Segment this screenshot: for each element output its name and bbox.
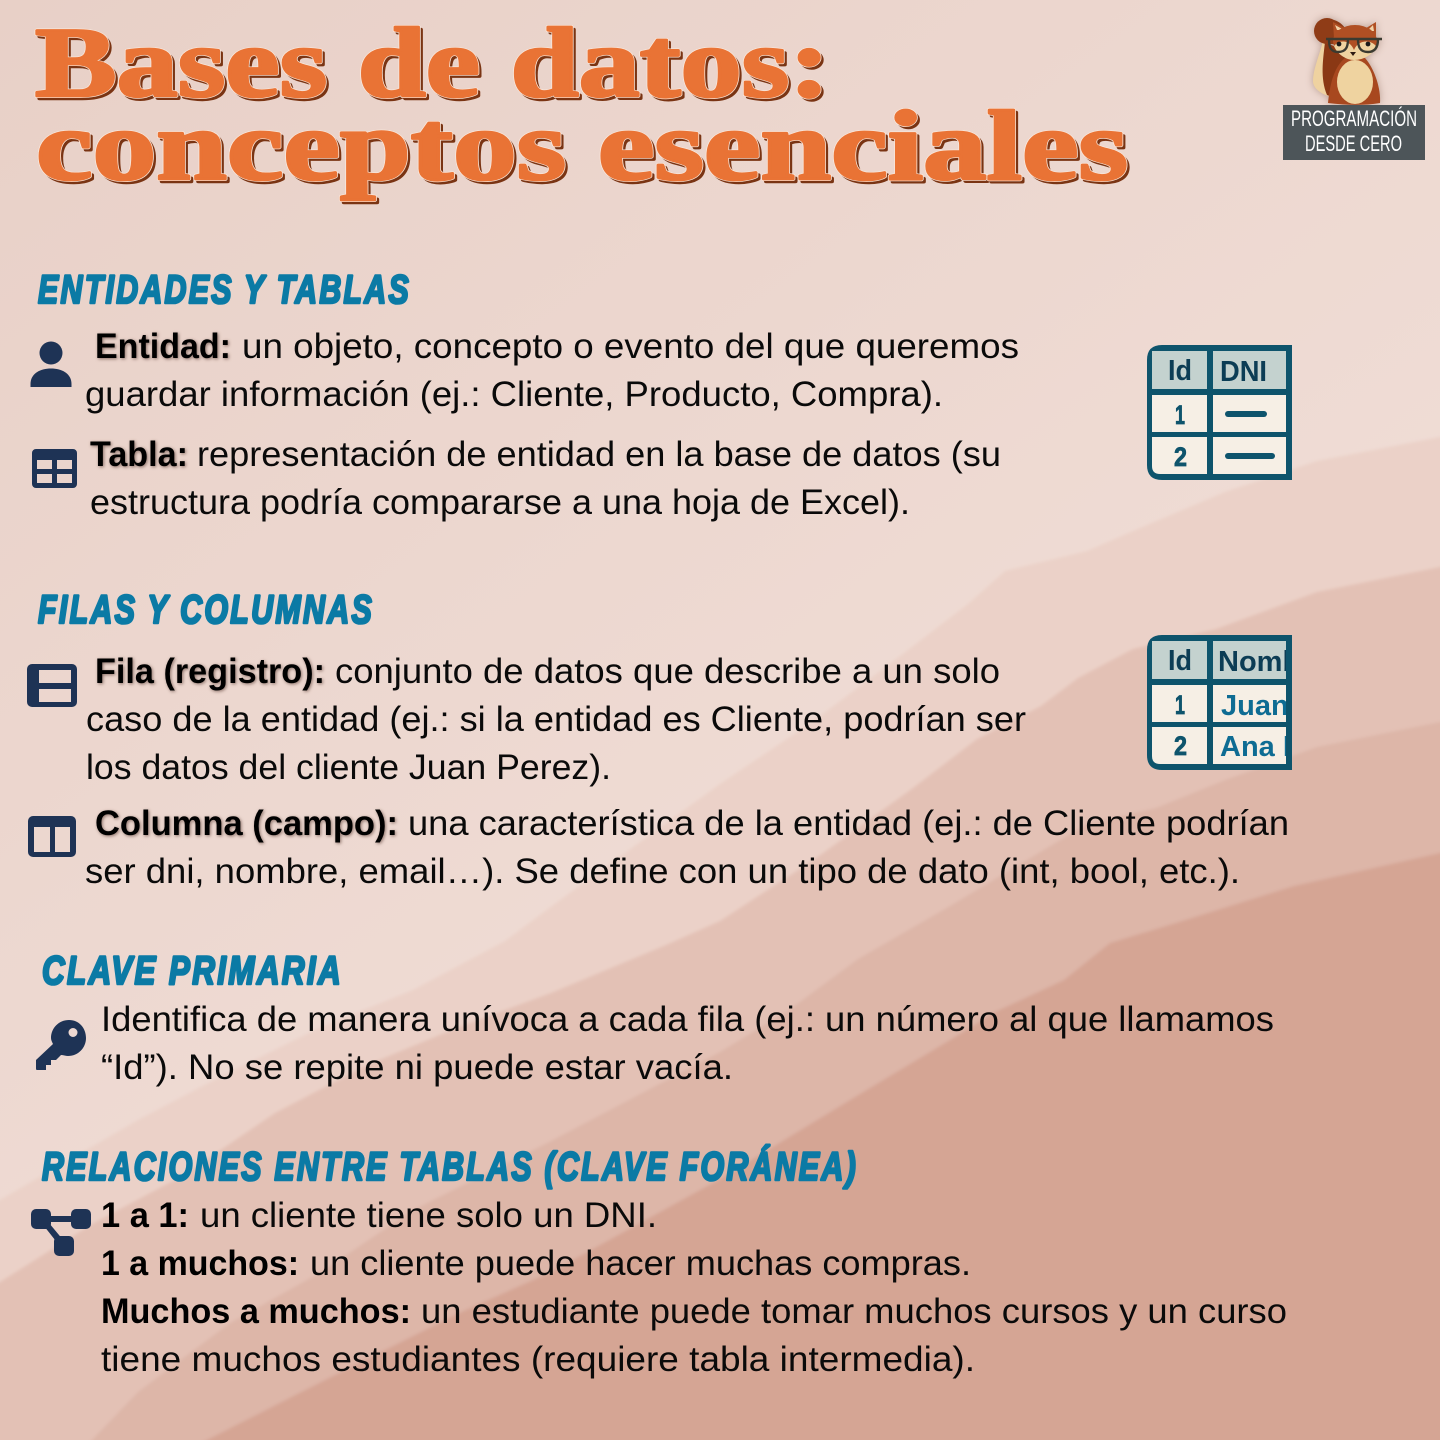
text block: relaciones: 1 a muchos:	[101, 1244, 299, 1283]
section: filas y columnas	[27, 588, 1359, 891]
icon: squirrel	[1313, 18, 1382, 105]
text block: relaciones: un cliente tiene solo un DNI.	[200, 1196, 657, 1235]
text block: columna: una característica de la entidad (ej.: de Cliente podrían	[408, 804, 1289, 843]
text block: fila: Fila (registro):	[95, 652, 325, 691]
table illustration: Id, DNI	[1147, 345, 1292, 480]
table illustration: Id, Nombre: 2	[1174, 731, 1187, 761]
icon: key	[36, 1020, 86, 1070]
badge	[1283, 105, 1425, 160]
text block: relaciones: 1 a 1:	[101, 1196, 189, 1235]
table illustration: Id, Nombre: Id	[1168, 645, 1192, 677]
icon: person	[30, 342, 72, 387]
section: clave primaria	[36, 949, 1274, 1087]
heading: filas y columnas: FILAS Y COLUMNAS	[38, 588, 374, 632]
table illustration: Id, Nombre: 1	[1175, 690, 1185, 720]
table illustration: Id, DNI: DNI	[1220, 356, 1267, 388]
title: Bases de datos:	[35, 7, 830, 118]
text block: fila: conjunto de datos que describe a un solo	[335, 652, 1000, 691]
text block: tabla	[90, 435, 1001, 522]
text block: fila: caso de la entidad (ej.: si la entidad es Cliente, podrían ser	[86, 700, 1026, 739]
text block: columna: Columna (campo):	[95, 804, 398, 843]
heading: entidades y tablas: ENTIDADES Y TABLAS	[38, 268, 411, 312]
text block: clave primaria: “Id”). No se repite ni puede estar vacía.	[101, 1048, 733, 1087]
text block: relaciones: tiene muchos estudiantes (requiere tabla intermedia).	[101, 1340, 975, 1379]
text block: relaciones: Muchos a muchos:	[101, 1292, 411, 1331]
title: Bases de datos:	[35, 7, 830, 118]
table illustration: Id, Nombre	[1147, 635, 1359, 770]
title: conceptos esenciales	[38, 92, 1130, 204]
title: conceptos esenciales	[36, 90, 1128, 201]
text block: entidad	[85, 327, 1019, 414]
text block: entidad: guardar información (ej.: Cliente, Producto, Compra).	[85, 375, 943, 414]
table illustration: Id, DNI: Id	[1168, 355, 1192, 387]
title: conceptos esenciales	[36, 90, 1128, 201]
logo: squirrel with glasses and badge	[1283, 18, 1425, 160]
text block: fila	[86, 652, 1026, 787]
text block: columna	[85, 804, 1289, 891]
icon: column	[28, 816, 76, 857]
table illustration: Id, Nombre: Juan	[1221, 690, 1289, 722]
heading: clave primaria: CLAVE PRIMARIA	[42, 949, 343, 993]
title	[35, 7, 1130, 204]
table illustration: Id, Nombre: Ana María	[1220, 731, 1359, 763]
icon: row	[27, 664, 77, 707]
icon: relation nodes	[31, 1209, 91, 1256]
text block: entidad: un objeto, concepto o evento del que queremos	[242, 327, 1019, 366]
title: Bases de datos:	[38, 10, 832, 120]
text block: relaciones: un estudiante puede tomar muchos cursos y un curso	[421, 1292, 1287, 1331]
text block: tabla: Tabla:	[90, 435, 188, 474]
icon: table	[32, 449, 77, 488]
text block: tabla: estructura podría compararse a una hoja de Excel).	[90, 483, 910, 522]
text block: relaciones	[101, 1196, 1287, 1379]
text block: clave primaria: Identifica de manera unívoca a cada fila (ej.: un número al que llamamos	[101, 1000, 1274, 1039]
text block: entidad: Entidad:	[95, 327, 231, 366]
text block: tabla: representación de entidad en la base de datos (su	[197, 435, 1001, 474]
text block: clave primaria	[101, 1000, 1274, 1087]
table illustration: Id, Nombre: Nombre	[1218, 646, 1328, 678]
text block: fila: los datos del cliente Juan Perez).	[86, 748, 611, 787]
section: entidades y tablas	[30, 268, 1292, 522]
text block: columna: ser dni, nombre, email…). Se define con un tipo de dato (int, bool, etc.).	[85, 852, 1240, 891]
heading: relaciones: RELACIONES ENTRE TABLAS (CLAVE FORÁNEA)	[42, 1144, 858, 1189]
table illustration: Id, DNI: 2	[1174, 442, 1187, 472]
table illustration: Id, DNI: 1	[1175, 400, 1185, 430]
section: relaciones entre tablas	[31, 1144, 1287, 1379]
text block: relaciones: un cliente puede hacer muchas compras.	[310, 1244, 971, 1283]
